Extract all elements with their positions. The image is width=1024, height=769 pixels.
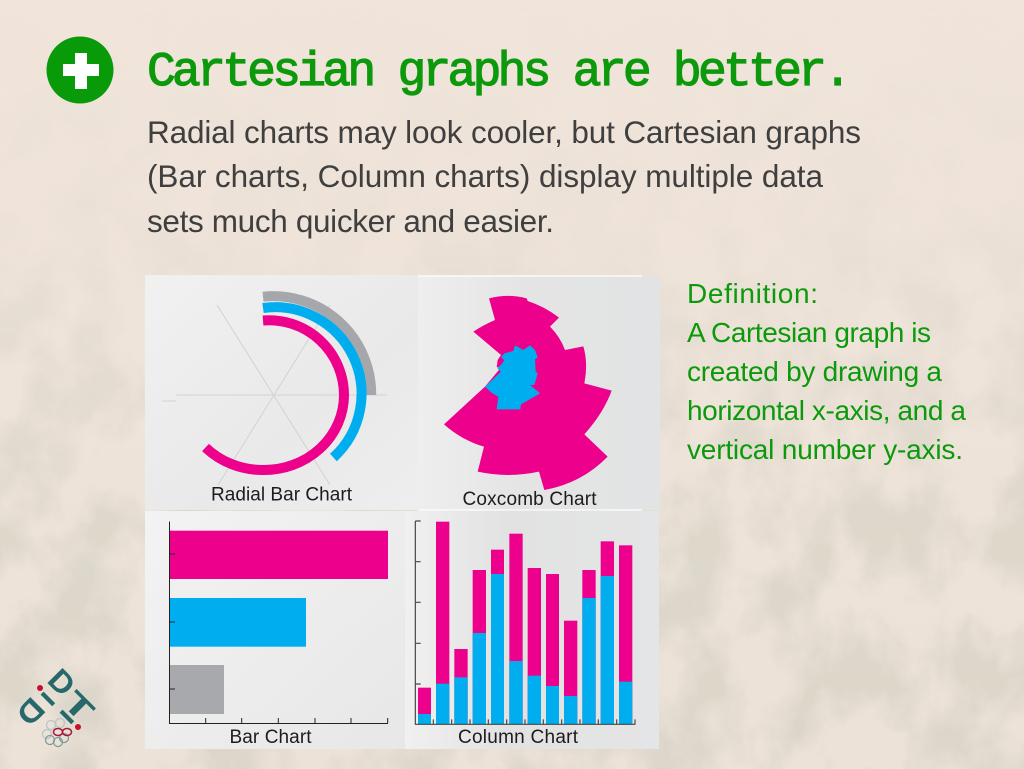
text block: definition: created by drawing a	[687, 356, 942, 387]
logo: Did It: ı	[50, 700, 81, 731]
textured paper background	[0, 388, 1024, 769]
panel: radial bar chart	[145, 275, 419, 510]
stacked columns	[415, 521, 635, 724]
label: column chart: Column Chart	[458, 727, 579, 748]
panel: column chart	[405, 511, 659, 749]
text block: intro paragraph	[147, 114, 861, 239]
text block: definition: A Cartesian graph is	[687, 317, 931, 348]
panel: coxcomb chart	[418, 276, 660, 510]
bar: magenta	[170, 531, 388, 579]
text block: definition	[687, 278, 966, 465]
wedges: blue	[485, 345, 540, 409]
title: Cartesian graphs are better.	[147, 46, 852, 100]
bar: gray	[170, 665, 224, 714]
text block: intro paragraph: Radial charts may look cooler, but Cartesian graphs	[147, 114, 861, 150]
wedges: magenta	[444, 296, 612, 490]
bar: blue	[170, 598, 306, 647]
arc: gray	[263, 296, 371, 395]
label: bar chart: Bar Chart	[230, 727, 312, 748]
icon: green plus circle	[46, 36, 114, 104]
text block: intro paragraph: (Bar charts, Column charts) display multiple data	[147, 158, 823, 194]
logo: Did It: D	[41, 661, 83, 703]
logo: Did It: D	[10, 691, 51, 732]
arc: blue	[263, 307, 362, 458]
logo: Did It: ı	[31, 682, 62, 713]
text block: intro paragraph: sets much quicker and easier.	[147, 203, 554, 239]
panel: bar chart	[145, 511, 405, 749]
text block: definition: vertical number y-axis.	[687, 434, 963, 465]
logo: Did It	[10, 661, 101, 746]
arc: magenta	[206, 320, 344, 470]
logo: Did It: T	[56, 684, 101, 729]
text block: definition: Definition:	[687, 278, 818, 309]
label: radial bar chart: Radial Bar Chart	[211, 484, 353, 506]
text block: definition: horizontal x-axis, and a	[687, 395, 966, 426]
label: coxcomb chart: Coxcomb Chart	[462, 489, 597, 510]
